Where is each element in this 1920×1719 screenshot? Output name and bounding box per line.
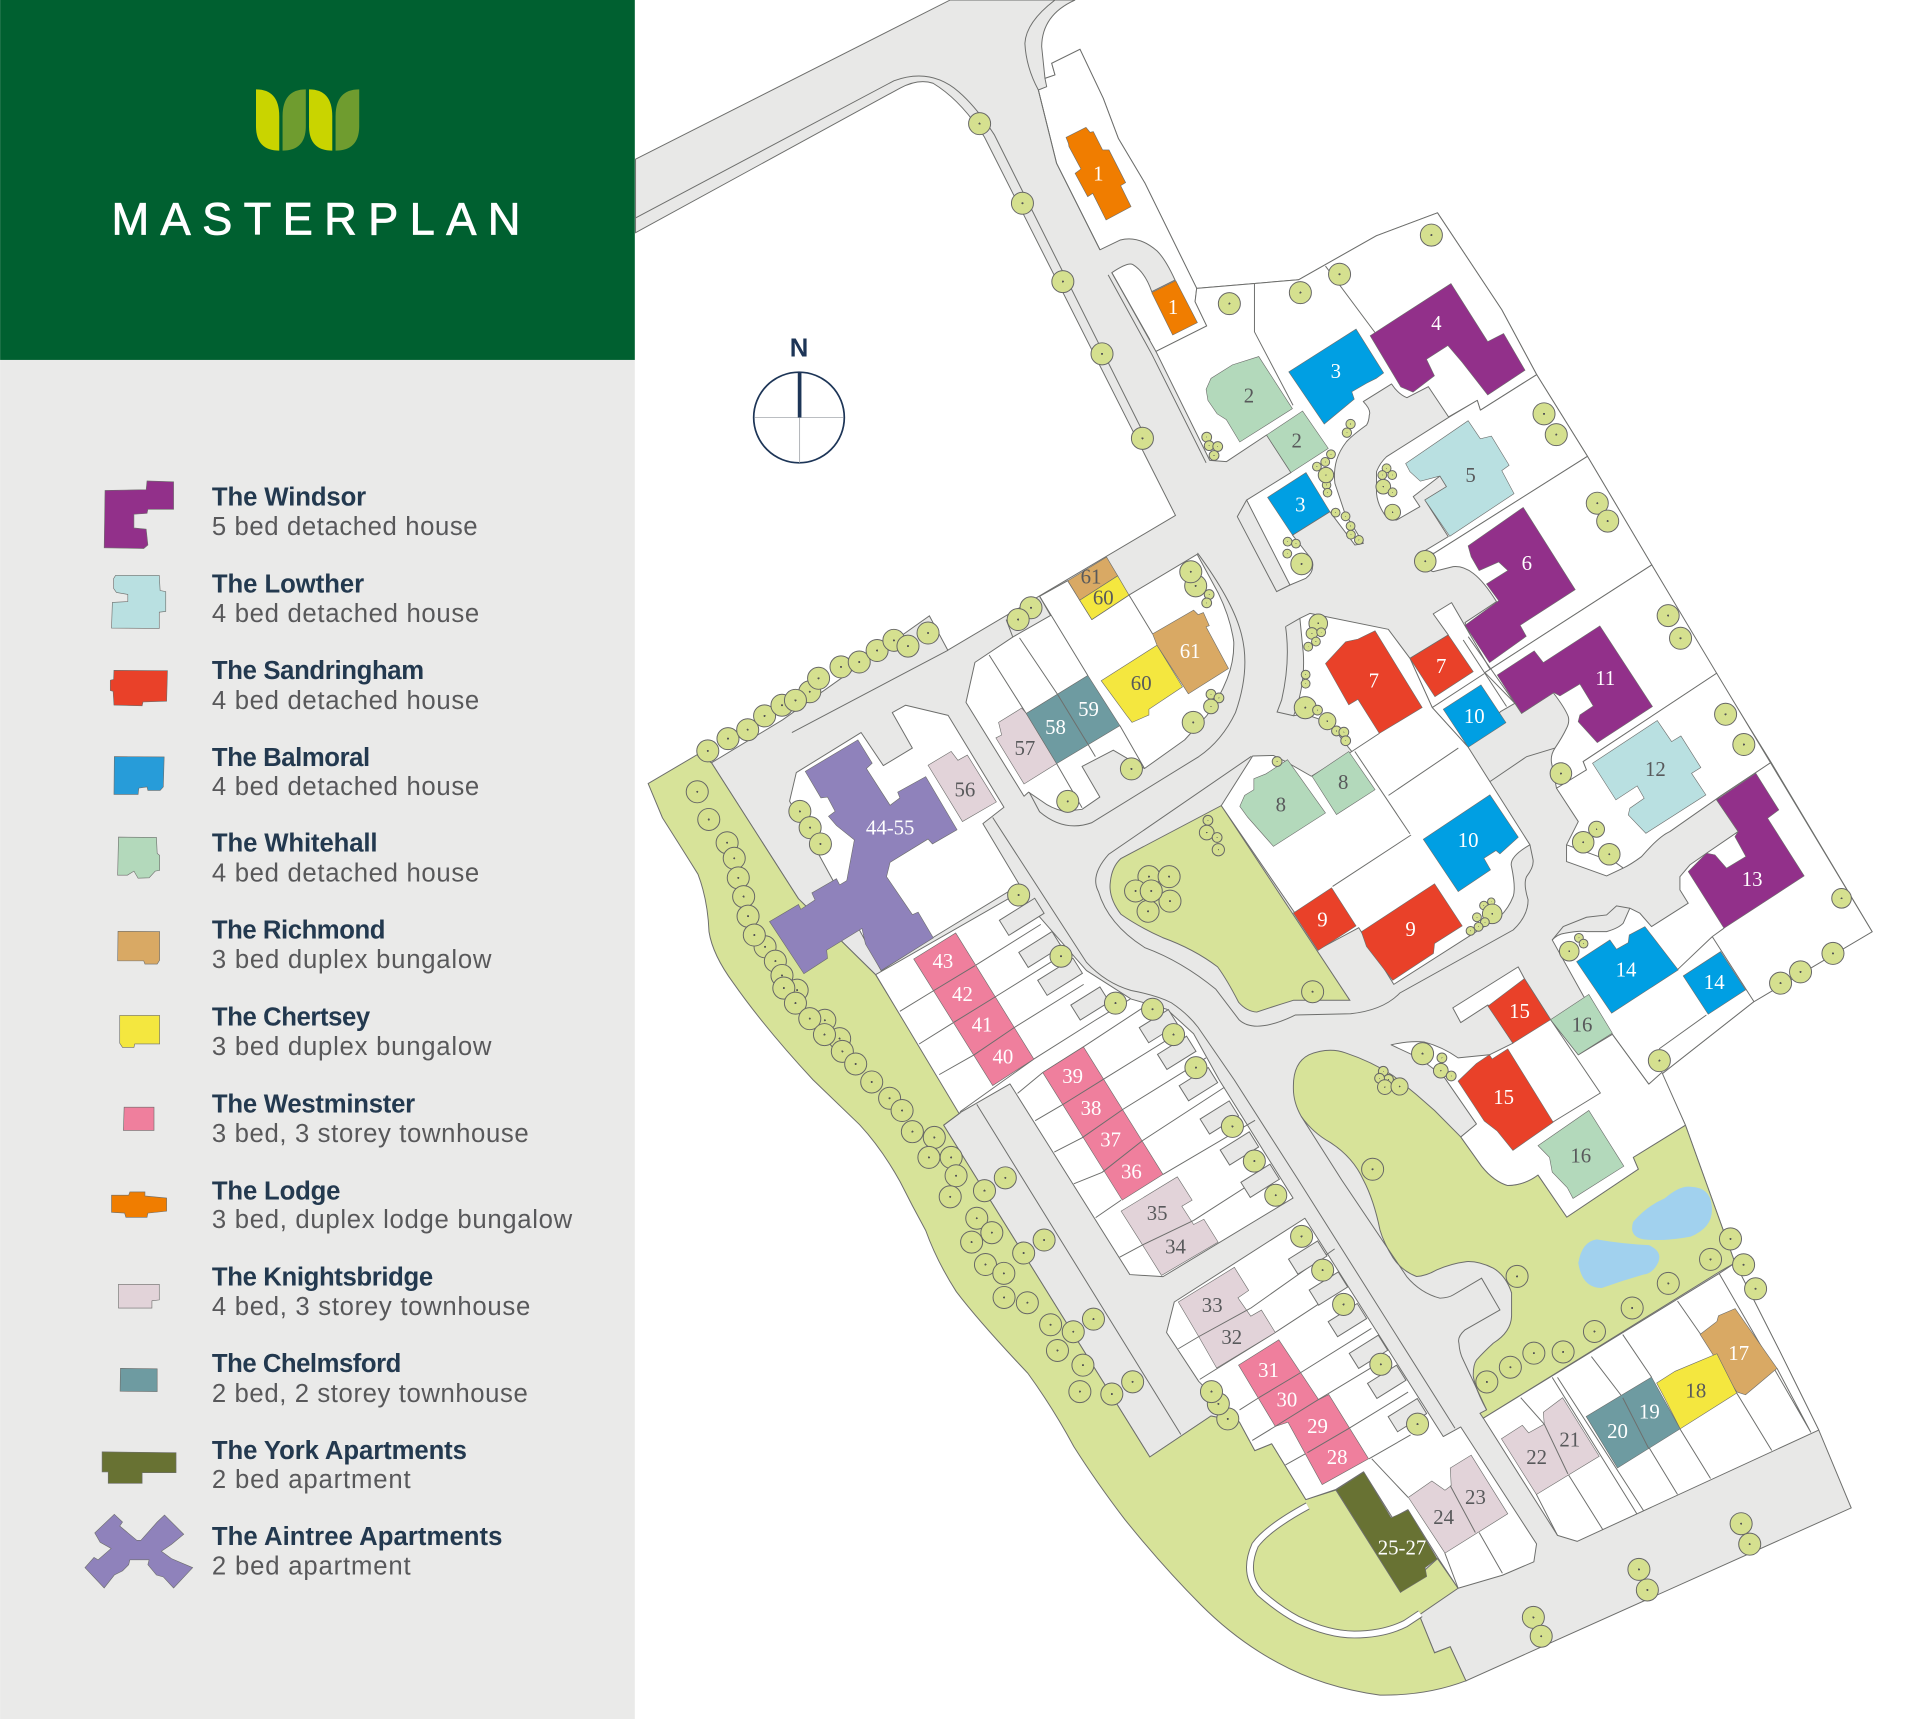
header panel [0, 0, 635, 360]
trees [686, 113, 1851, 1647]
lawn footpath [1250, 1506, 1420, 1635]
legend row: The Balmoral: The Balmoral [212, 744, 370, 772]
plot 7 small: The Sandringham: 7 [1436, 654, 1446, 678]
north compass: N [790, 334, 808, 362]
plot 60 large: The Chertsey [1101, 645, 1182, 722]
plot 61 small: The Richmond: 61 [1081, 565, 1101, 589]
plots 58 and 59: The Chelmsford: 59 [1078, 697, 1099, 721]
plots 28-31: The Westminster: 28 [1327, 1445, 1348, 1469]
plots 32 and 33: The Knightsbridge: 32 [1221, 1325, 1242, 1349]
legend row: The Chertsey [120, 1003, 492, 1061]
legend row: The Lowther: The Lowther [212, 571, 364, 599]
plot 1 south: The Lodge [1152, 281, 1197, 335]
legend row: The Lodge: 3 bed, duplex lodge bungalow [212, 1206, 573, 1234]
plot 56: The Knightsbridge: 56 [954, 778, 975, 802]
plots 23 and 24: The Knightsbridge: 24 [1433, 1505, 1455, 1529]
plot block 28 to 33 and 23 24 [1167, 1218, 1537, 1588]
plot 9 large: The Sandringham [1361, 884, 1462, 980]
legend row: The Chelmsford: 2 bed, 2 storey townhouse [212, 1380, 528, 1408]
legend row: The Westminster [123, 1090, 529, 1148]
plot 15 large: The Sandringham: 15 [1493, 1085, 1514, 1109]
legend row: The Aintree Apartments: 2 bed apartment [212, 1553, 411, 1581]
legend row: The Chelmsford: The Chelmsford [212, 1350, 401, 1378]
plot 61 large: The Richmond: 61 [1180, 639, 1201, 663]
plots 21 and 22: The Knightsbridge [1501, 1398, 1599, 1494]
plot 8 small: The Whitehall: 8 [1338, 770, 1348, 794]
legend row: The Aintree Apartments [85, 1514, 502, 1588]
plot 17: The Richmond: 17 [1728, 1341, 1749, 1365]
plot 57: The Knightsbridge: 57 [1014, 736, 1035, 760]
plot 3 large: The Balmoral [1289, 329, 1384, 424]
road edge and plot boundary lines [636, 0, 1811, 1588]
plots 28-31: The Westminster: 30 [1277, 1387, 1297, 1411]
plots 36-39: The Westminster: 39 [1062, 1064, 1083, 1088]
legend row: The Aintree Apartments: The Aintree Apartments [212, 1523, 502, 1551]
plot block north east [1156, 213, 1537, 585]
plots 19 and 20: The Chelmsford: 20 [1607, 1419, 1628, 1443]
plot 3 small: The Balmoral: 3 [1295, 492, 1306, 516]
legend row: The Sandringham: 4 bed detached house [212, 687, 479, 715]
plot 4: The Windsor [1370, 284, 1525, 395]
legend row: The Westminster: 3 bed, 3 storey townhouse [212, 1120, 529, 1148]
plot 8 large: The Whitehall: 8 [1276, 792, 1286, 816]
plot 2 small: The Whitehall [1267, 411, 1328, 473]
legend row: The Lodge [112, 1177, 573, 1234]
legend row: The Lodge: The Lodge [212, 1177, 340, 1205]
plot 13: The Windsor [1688, 773, 1804, 928]
plot 12: The Lowther [1593, 721, 1706, 833]
plot 1 south: The Lodge: 1 [1168, 295, 1178, 319]
plots 34 and 35: The Knightsbridge [1121, 1177, 1218, 1275]
legend row: The Lowther [112, 571, 479, 628]
plots 25-27: The York Apartments: 25-27 [1378, 1535, 1426, 1559]
plot 15 large: The Sandringham [1458, 1049, 1553, 1150]
south east public green with ponds [1293, 1050, 1735, 1418]
plot 60 small: The Chertsey [1080, 576, 1129, 620]
plots 34 and 35: The Knightsbridge: 34 [1165, 1234, 1186, 1258]
plot block south 17 to 22 [1483, 1263, 1819, 1541]
plots 28-31: The Westminster [1239, 1340, 1369, 1485]
plots 40-43: The Westminster: 42 [952, 982, 973, 1006]
plot 11: The Windsor: 11 [1595, 666, 1615, 690]
plots 21 and 22: The Knightsbridge: 21 [1559, 1428, 1580, 1452]
plots 36-39: The Westminster: 37 [1100, 1128, 1121, 1152]
legend row: The Whitehall: 4 bed detached house [212, 860, 479, 888]
plot 57: The Knightsbridge [996, 708, 1057, 784]
plots 40-43: The Westminster: 43 [932, 949, 953, 973]
legend row: The Whitehall: The Whitehall [212, 830, 378, 858]
legend row: The Windsor: The Windsor [212, 484, 366, 512]
plot 2 large: The Whitehall: 2 [1244, 383, 1254, 407]
plot 10 small: The Balmoral: 10 [1464, 704, 1485, 728]
plot block 11 [1485, 565, 1717, 788]
plot 13: The Windsor: 13 [1742, 867, 1763, 891]
plots 21 and 22: The Knightsbridge: 22 [1526, 1445, 1547, 1469]
plot 15 small: The Sandringham [1488, 979, 1551, 1043]
plot 61 small: The Richmond [1068, 557, 1118, 600]
plot block 57 to 61 [966, 554, 1234, 811]
plot 8 small: The Whitehall [1312, 752, 1375, 815]
plot 16 small: The Whitehall: 16 [1572, 1013, 1592, 1037]
plots 58 and 59: The Chelmsford: 58 [1045, 715, 1066, 739]
plot 2 small: The Whitehall: 2 [1291, 429, 1302, 453]
plot block apartments [790, 705, 1020, 971]
legend row: The Windsor [104, 481, 478, 549]
west green landscape band and lawn [648, 754, 1466, 1695]
plot block north lodge [1038, 49, 1207, 351]
legend row: The Richmond: 3 bed duplex bungalow [212, 946, 492, 974]
plot 10 large: The Balmoral [1423, 795, 1518, 892]
north compass [754, 334, 844, 463]
plot 15 small: The Sandringham: 15 [1509, 999, 1530, 1023]
legend row: The Lowther: 4 bed detached house [212, 600, 479, 628]
legend row: The York Apartments [102, 1437, 467, 1494]
legend row: The Whitehall [118, 830, 479, 888]
plots 19 and 20: The Chelmsford [1586, 1377, 1680, 1468]
plot 14 large: The Balmoral [1577, 927, 1678, 1013]
plot 2 large: The Whitehall [1206, 357, 1292, 442]
plot 9 small: The Sandringham [1293, 888, 1356, 950]
plot 14 small: The Balmoral [1683, 952, 1746, 1014]
plots 36-39: The Westminster: 38 [1081, 1096, 1101, 1120]
plot 61 large: The Richmond [1153, 610, 1229, 694]
legend row: The Knightsbridge [118, 1264, 530, 1321]
plots 28-31: The Westminster: 31 [1258, 1358, 1279, 1382]
plot 9 small: The Sandringham: 9 [1317, 907, 1328, 931]
plots 40-43: The Westminster [914, 933, 1034, 1086]
legend row: The Sandringham: The Sandringham [212, 657, 424, 685]
plot 18: The Chertsey: 18 [1685, 1379, 1706, 1403]
plot 1 north: The Lodge: 1 [1093, 162, 1104, 186]
plot 7 large: The Sandringham: 7 [1369, 669, 1379, 693]
plot block 13 and 14 [1552, 763, 1872, 1084]
plot 7 large: The Sandringham [1325, 631, 1422, 733]
lawn footpath outline [1250, 1506, 1420, 1635]
plot block 15 and 16 [1391, 967, 1685, 1217]
plots 40-43: The Westminster: 40 [992, 1044, 1013, 1068]
legend row: The Knightsbridge: 4 bed, 3 storey townhouse [212, 1293, 530, 1321]
plot 16 large: The Whitehall [1538, 1110, 1624, 1198]
plot 3 large: The Balmoral: 3 [1331, 359, 1341, 383]
plot 56: The Knightsbridge [928, 751, 996, 822]
plots 23 and 24: The Knightsbridge [1408, 1455, 1508, 1553]
legend row: The Sandringham [110, 657, 479, 715]
pond north [1632, 1187, 1712, 1240]
plot 12: The Lowther: 12 [1645, 757, 1666, 781]
plots 28-31: The Westminster: 29 [1307, 1414, 1328, 1438]
plot 10 large: The Balmoral: 10 [1458, 828, 1479, 852]
plot 14 large: The Balmoral: 14 [1616, 958, 1637, 982]
legend row: The Balmoral [114, 744, 479, 801]
legend row: The Westminster: The Westminster [212, 1090, 415, 1118]
plot block 5 [1377, 375, 1587, 553]
plot 11: The Windsor [1497, 626, 1652, 743]
plot 6: The Windsor [1465, 507, 1575, 663]
legend panel [0, 360, 635, 1719]
plots 36-39: The Westminster: 36 [1121, 1160, 1142, 1184]
roads and paved areas [636, 0, 1872, 1681]
plot 5: The Lowther: 5 [1465, 463, 1476, 487]
plot block 34 to 43 [876, 893, 1293, 1277]
white plots [790, 49, 1872, 1588]
plot 4: The Windsor: 4 [1431, 311, 1442, 335]
plot 3 small: The Balmoral [1268, 473, 1330, 535]
plots 25-27: The York Apartments [1336, 1472, 1437, 1592]
central green island [1110, 806, 1350, 1012]
title: MASTERPLAN [112, 194, 520, 245]
plot 7 small: The Sandringham [1410, 635, 1473, 697]
plot 9 large: The Sandringham: 9 [1405, 917, 1416, 941]
legend row: The Balmoral: 4 bed detached house [212, 773, 479, 801]
plot 16 small: The Whitehall [1551, 994, 1612, 1055]
legend row: The Windsor: 5 bed detached house [212, 513, 478, 541]
plots 23 and 24: The Knightsbridge: 23 [1465, 1485, 1486, 1509]
plots 34 and 35: The Knightsbridge: 35 [1147, 1201, 1168, 1225]
legend row: The Chertsey: 3 bed duplex bungalow [212, 1033, 492, 1061]
logo [256, 89, 359, 151]
plot 16 large: The Whitehall: 16 [1570, 1144, 1591, 1168]
legend row: The Richmond: The Richmond [212, 916, 385, 944]
plot 8 large: The Whitehall [1240, 760, 1325, 846]
plot 60 small: The Chertsey: 60 [1093, 585, 1114, 609]
plot block 12 [1557, 673, 1771, 876]
plot 14 small: The Balmoral: 14 [1704, 970, 1725, 994]
plot 18: The Chertsey [1657, 1354, 1737, 1429]
plots 36-39: The Westminster [1043, 1047, 1163, 1200]
legend row: The York Apartments: The York Apartments [212, 1437, 467, 1465]
plot block small 7 and 10 [1410, 603, 1515, 747]
plot 6: The Windsor: 6 [1522, 551, 1532, 575]
legend row: The Chertsey: The Chertsey [212, 1003, 371, 1031]
plots 19 and 20: The Chelmsford: 19 [1639, 1400, 1660, 1424]
plot 10 small: The Balmoral [1443, 685, 1506, 747]
plot block 6 [1425, 456, 1652, 673]
plot 1 north: The Lodge [1066, 127, 1131, 220]
plots 40-43: The Westminster: 41 [972, 1013, 992, 1037]
legend row: The York Apartments: 2 bed apartment [212, 1466, 411, 1494]
plot 5: The Lowther [1406, 421, 1514, 536]
plot 17: The Richmond [1700, 1309, 1777, 1395]
plot 60 large: The Chertsey: 60 [1131, 671, 1152, 695]
plots 44-55: The Aintree Apartments: 44-55 [866, 816, 914, 840]
plots 44-55: The Aintree Apartments [769, 740, 957, 974]
legend row: The Knightsbridge: The Knightsbridge [212, 1264, 433, 1292]
parking bays [999, 898, 1427, 1432]
pond south [1578, 1239, 1659, 1288]
site plan map [636, 0, 1872, 1695]
legend row: The Richmond [118, 916, 492, 974]
buildings [769, 127, 1804, 1592]
plots 32 and 33: The Knightsbridge: 33 [1202, 1293, 1223, 1317]
plots 58 and 59: The Chelmsford [1026, 675, 1120, 764]
plot block 7 to 10 [1221, 613, 1530, 984]
plots 32 and 33: The Knightsbridge [1178, 1267, 1275, 1368]
legend row: The Chelmsford [120, 1350, 528, 1408]
